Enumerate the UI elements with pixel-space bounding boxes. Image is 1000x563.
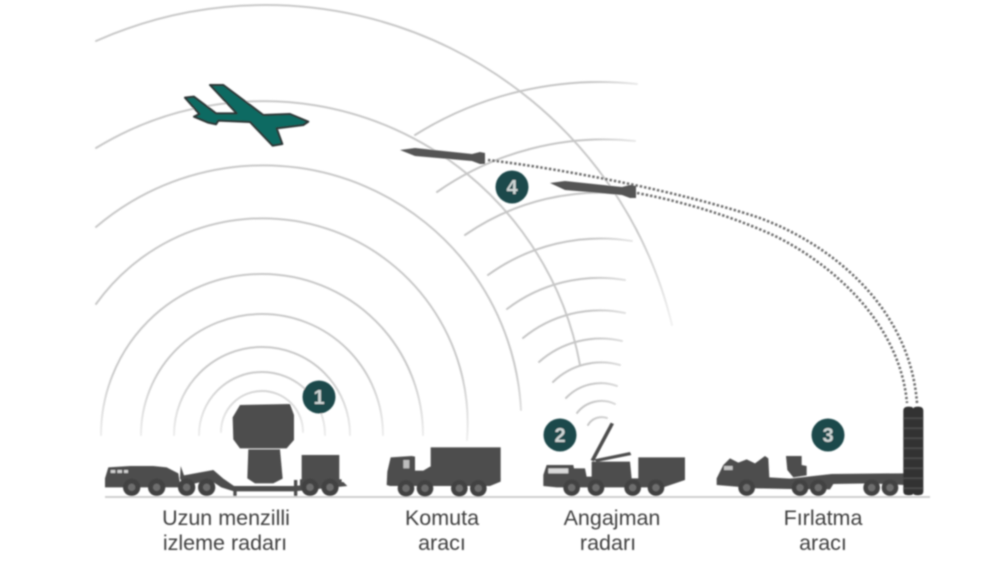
- missile trajectory: upper: [488, 160, 917, 403]
- badge 3: 3: [822, 425, 834, 447]
- badge 1: [302, 380, 336, 414]
- label: launcher vehicle: aracı: [799, 531, 847, 555]
- label: engagement radar: radarı: [580, 531, 636, 555]
- label: command vehicle: Komuta: [405, 506, 479, 530]
- label: command vehicle: aracı: [418, 531, 466, 555]
- missile trajectory: lower: [637, 193, 907, 403]
- vehicle: launcher: [717, 407, 923, 496]
- vehicle: long-range surveillance radar: [105, 404, 347, 496]
- engagement radar arcs: [415, 82, 637, 425]
- label: long-range radar: Uzun menzilli: [162, 506, 290, 530]
- icon: airplane: [185, 85, 308, 146]
- badge 1: 1: [313, 387, 325, 409]
- vehicle: engagement radar: [543, 423, 685, 496]
- long-range radar rings: [96, 5, 672, 440]
- icon: missile lower: [550, 181, 636, 198]
- label: launcher vehicle: Fırlatma: [784, 506, 862, 530]
- icon: missile upper: [400, 148, 485, 164]
- badge 4: [496, 170, 528, 204]
- label: long-range radar: izleme radarı: [163, 531, 287, 555]
- badge 2: [544, 418, 576, 452]
- label: engagement radar: Angajman: [564, 506, 660, 530]
- ground line: [105, 496, 930, 498]
- badge 4: 4: [506, 177, 518, 199]
- badge 2: 2: [554, 425, 566, 447]
- badge 3: [812, 418, 844, 452]
- vehicle: command truck: [387, 447, 501, 497]
